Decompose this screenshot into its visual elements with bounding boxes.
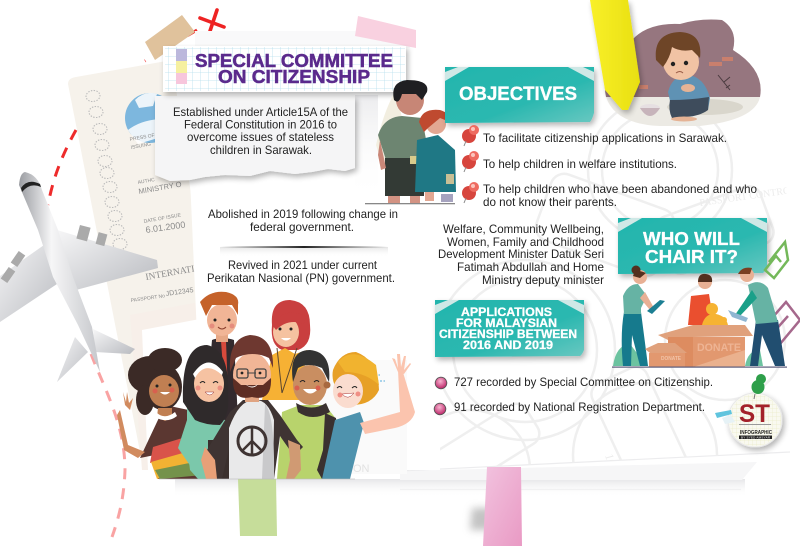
- illustration: donation volunteers: [612, 242, 800, 368]
- banner: objectives: [445, 67, 594, 123]
- right passport page behind group: ON: [353, 463, 370, 475]
- background passport stamps: [440, 112, 786, 466]
- banner: applications: CITIZENSHIP BETWEEN: [439, 327, 577, 341]
- right passport page behind group: [317, 360, 407, 475]
- logo badge: [715, 374, 782, 447]
- panel: description (abolished and revived): [190, 95, 440, 470]
- title: SPECIAL COMMITTEE: [195, 51, 393, 71]
- passport: AUTHC: [137, 177, 156, 186]
- icon: red pin: [462, 125, 479, 146]
- objective text 3: do not know their parents.: [483, 195, 617, 209]
- bullet: [435, 377, 447, 389]
- green tab: [238, 479, 277, 536]
- icon: paper clips: [765, 242, 800, 344]
- green hoodie man: [277, 350, 338, 479]
- banner: applications: [435, 300, 584, 357]
- panel: established text card: [155, 96, 355, 181]
- green pin: [752, 374, 766, 399]
- paper stack: [60, 70, 790, 497]
- banner: objectives: OBJECTIVES: [459, 84, 577, 105]
- blonde woman: [322, 352, 415, 479]
- logo badge: INFOGRAPHIC: [740, 430, 772, 436]
- applications figures: [434, 375, 713, 415]
- curly hair man: [117, 348, 205, 479]
- icon: red pin: [462, 182, 479, 203]
- passport: INTERNATIC: [145, 263, 202, 283]
- back man: [200, 292, 238, 420]
- hijab woman: [178, 345, 230, 479]
- passport: PRESS OF: [129, 133, 155, 143]
- chair text: [438, 222, 604, 287]
- objective text 2: To help children in welfare institutions.: [483, 157, 677, 171]
- background passport stamps: PASSPORT CONTROL: [699, 185, 797, 209]
- bullet: [434, 403, 446, 415]
- panel: established text card: children in Sarawak.: [210, 143, 312, 157]
- small donate box: DONATE: [661, 356, 682, 362]
- abolished text: [208, 207, 398, 234]
- panel: title card: [163, 46, 406, 92]
- objective text 3: To help children who have been abandoned and who: [483, 182, 757, 196]
- abolished text: federal government.: [250, 220, 354, 234]
- banner: applications: 2016 AND 2019: [463, 338, 553, 352]
- passport: JD12345: [165, 287, 194, 298]
- airplane: [0, 172, 158, 382]
- figure 727: 727 recorded by Special Committee on Citizenship.: [454, 375, 713, 389]
- red hair woman: [262, 300, 310, 400]
- middle volunteer: [688, 274, 714, 325]
- background passport stamps: LONDON: [432, 48, 496, 70]
- abolished text: Abolished in 2019 following change in: [208, 207, 398, 221]
- red X mark: [200, 10, 224, 31]
- passport: DATE OF ISSUE: [143, 212, 182, 225]
- panel: established text card: overcome issues of stateless: [187, 130, 334, 144]
- banner: who will chair it: CHAIR IT?: [645, 247, 738, 267]
- revived text: Revived in 2021 under current: [228, 258, 378, 272]
- passport: PASSPORT No: [130, 293, 166, 304]
- chair text: Ministry deputy minister: [482, 273, 604, 287]
- revived text: [207, 258, 395, 285]
- objective text 3: [483, 182, 757, 209]
- small donate box: [645, 343, 687, 367]
- pink tab: [470, 467, 522, 546]
- banner: who will chair it: [618, 218, 767, 274]
- chair text: Women, Family and Childhood: [447, 235, 604, 249]
- background passport stamps: OCT 09: [455, 30, 504, 50]
- title: ON CITIZENSHIP: [218, 67, 370, 87]
- panel: established text card: Federal Constitution in 2016 to: [184, 118, 337, 132]
- left volunteer: [622, 266, 665, 366]
- logo badge: ST: [739, 400, 770, 428]
- objective text 1: To facilitate citizenship applications in Sarawak.: [483, 131, 727, 145]
- right volunteer: [728, 268, 785, 366]
- chair text: Fatimah Abdullah and Home: [457, 260, 604, 274]
- yellow marker pencil: [590, 0, 640, 110]
- icon: red pin: [462, 151, 479, 172]
- passport: ISSUING: [130, 141, 152, 151]
- teddy bear: [702, 303, 728, 325]
- banner: who will chair it: WHO WILL: [643, 229, 740, 249]
- illustration: two stateless children: [365, 80, 456, 204]
- chair text: Development Minister Datuk Seri: [438, 247, 604, 261]
- banner: applications: APPLICATIONS: [461, 305, 552, 319]
- red dashed flight path: [48, 30, 197, 537]
- illustration: sad boy: [605, 20, 761, 126]
- title: [195, 51, 393, 87]
- torn notebook top: [195, 31, 410, 48]
- figure 91: 91 recorded by National Registration Department.: [454, 400, 705, 414]
- bearded man: [201, 335, 303, 479]
- passport: 6.01.2000: [145, 220, 186, 235]
- passport: [68, 60, 230, 470]
- background passport stamps: 12 OCT 27: [440, 309, 495, 329]
- revived text: Perikatan Nasional (PN) government.: [207, 271, 395, 285]
- large donate box: [658, 325, 753, 367]
- passport: MINISTRY O: [138, 180, 182, 196]
- background passport stamps: 10 SEP 200: [602, 452, 630, 510]
- logo badge: BY SYED AMSYAR: [741, 436, 771, 440]
- chair text: Welfare, Community Wellbeing,: [443, 222, 604, 236]
- objectives list: [462, 125, 757, 209]
- illustration: diverse group of people: [117, 292, 415, 480]
- panel: established text card: Established under Article15A of the: [173, 105, 348, 119]
- banner: applications: FOR MALAYSIAN: [456, 316, 557, 330]
- pink tape: [355, 16, 416, 48]
- large donate box: DONATE: [697, 342, 741, 354]
- tan tape: [145, 15, 195, 60]
